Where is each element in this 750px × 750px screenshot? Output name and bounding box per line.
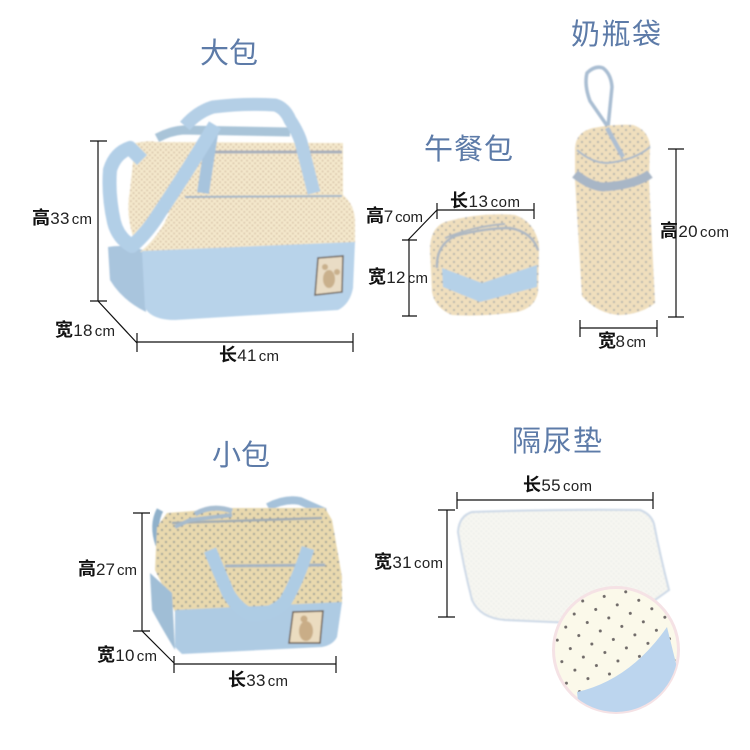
title: 大包: 大包 — [200, 37, 258, 70]
dimensions: large bag — [32, 141, 353, 365]
title: 奶瓶袋: 奶瓶袋 — [571, 18, 661, 51]
label: width 18cm: 宽18cm — [55, 319, 115, 340]
label: length 13com: 长13com — [450, 191, 520, 211]
icon: lunch bag — [430, 214, 539, 316]
dimensions: lunch bag — [366, 191, 534, 316]
label: height 20com: 高20com — [660, 220, 729, 241]
icon: small bag — [150, 500, 342, 654]
label: height 27cm: 高27cm — [78, 558, 137, 579]
label: length 41cm: 长41cm — [219, 345, 279, 365]
icon: bear patch on large bag — [315, 256, 343, 295]
label: width 10cm: 宽10cm — [97, 644, 157, 665]
title: 午餐包: 午餐包 — [424, 133, 513, 166]
label: width 8cm: 宽8cm — [598, 330, 646, 351]
icon: fabric close-up circle — [552, 586, 680, 714]
label: height 7com: 高7com — [366, 205, 423, 226]
icon: bear patch on small bag — [289, 611, 323, 643]
title: 隔尿垫: 隔尿垫 — [512, 425, 602, 458]
dimensions: changing pad — [374, 475, 653, 617]
icon: bottle bag — [575, 67, 655, 315]
label: width 12cm: 宽12cm — [368, 266, 428, 287]
icon: changing pad — [458, 510, 669, 625]
label: width 31com: 宽31com — [374, 551, 443, 572]
icon: large bag — [108, 104, 355, 320]
label: length 33cm: 长33cm — [228, 670, 288, 690]
title: 小包: 小包 — [212, 439, 270, 472]
label: length 55com: 长55com — [523, 475, 592, 495]
label: height 33cm: 高33cm — [32, 207, 92, 228]
dimensions: small bag — [78, 513, 336, 690]
dimensions: bottle bag — [580, 149, 729, 351]
